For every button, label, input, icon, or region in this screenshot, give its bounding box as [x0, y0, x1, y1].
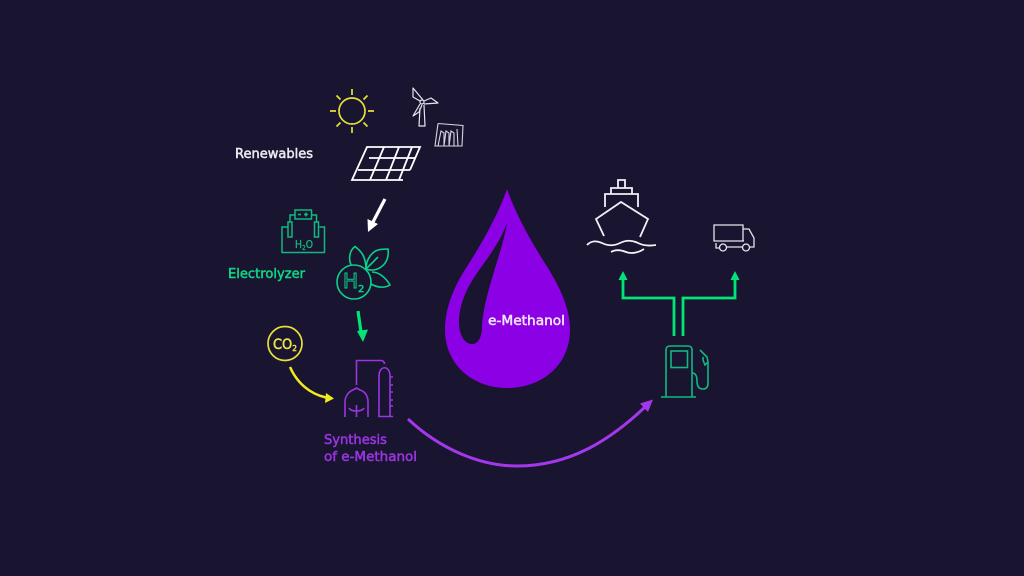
label: Synthesis of e-Methanol: Synthesis: [324, 433, 387, 448]
label: H2O: H: [295, 238, 303, 251]
label: e-Methanol: e-Methanol: [488, 314, 565, 329]
label: Synthesis of e-Methanol: of e-Methanol: [324, 450, 417, 465]
label: CO2: CO: [273, 337, 294, 353]
icon: CO2 circle: [268, 326, 302, 360]
arrow: fuel to ship: [618, 271, 674, 336]
label: Renewables: Renewables: [235, 147, 313, 162]
icon: e-Methanol drop: [445, 189, 570, 388]
arrow: synthesis to fuel station: [408, 400, 653, 466]
icon: truck: [714, 225, 754, 251]
icon: green hydrogen leaves: [337, 246, 390, 299]
icon: solar panel: [352, 147, 420, 180]
label: H2: H: [343, 269, 358, 293]
icon: synthesis reactor: [345, 360, 393, 417]
arrow: CO2 to synthesis: [290, 367, 334, 403]
label: H2O: O: [306, 238, 313, 251]
label: Synthesis of e-Methanol: [324, 433, 417, 465]
label: CO2: 2: [292, 344, 297, 353]
arrow: hydrogen to synthesis: [357, 311, 368, 342]
icon: wind turbine: [413, 88, 438, 126]
label: H2O: 2: [302, 244, 306, 252]
icon: electrolyzer: [282, 210, 325, 252]
icon: hydro dam: [435, 124, 463, 146]
icon: green hydrogen leaves: 2: [358, 284, 364, 295]
icon: sun: [330, 89, 374, 133]
icon: fuel pump: [661, 346, 708, 397]
arrow: renewables to hydrogen: [368, 199, 385, 232]
label: Electrolyzer: Electrolyzer: [228, 267, 306, 282]
arrow: fuel to truck: [683, 271, 740, 336]
icon: ship: [587, 180, 656, 253]
